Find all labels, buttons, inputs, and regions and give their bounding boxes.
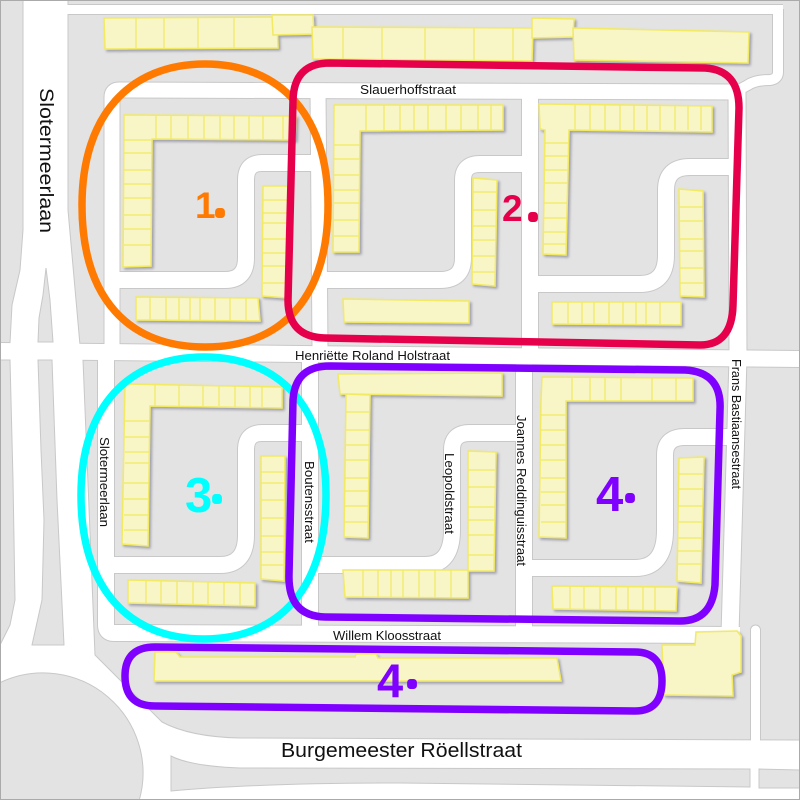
number 3: . [214,483,220,505]
number 1: . [217,197,223,219]
buildings: block 5 [338,373,502,598]
buildings: block 6 [539,377,704,611]
zone 2 outline [288,63,739,345]
street label: Slotermeerlaan main: Slotermeerlaan [35,88,56,233]
number 4 south: 4 [377,654,403,707]
number 3: 3 [185,469,212,523]
street label: Leopoldstraat: Leopoldstraat [442,453,456,535]
number 1: 1 [195,185,216,226]
street label: Boutensstraat: Boutensstraat [302,461,316,544]
street label: Frans Bastiaansestraat: Frans Bastiaansestraat [729,359,743,490]
buildings: block 1 [123,115,296,321]
number 2: . [530,201,536,223]
number 4: . [627,482,633,504]
street label: Henriëtte Roland Holstraat: Henriëtte Roland Holstraat [295,349,451,363]
street label: Slauerhoffstraat: Slauerhoffstraat [360,83,457,97]
street label: Willem Kloosstraat: Willem Kloosstraat [333,629,442,643]
medians and green strips [0,268,800,800]
buildings: top row [104,15,749,63]
zone 4 south outline [125,647,662,711]
buildings: block 4 [122,384,285,606]
zone 1 outline [82,64,328,347]
buildings: block 3 [539,104,712,325]
street label: Burgemeester Röellstraat: Burgemeester Röellstraat [281,740,522,762]
zone 3 outline [81,357,326,639]
number 2: 2 [502,188,523,229]
number 4: 4 [596,468,623,522]
street label: Joannes Reddinguisstraat: Joannes Reddinguisstraat [514,415,528,567]
street label: Slotermeerlaan small: Slotermeerlaan [97,437,111,527]
number 4 south: . [409,668,415,690]
buildings: south row [154,631,741,696]
zone 4 outline [289,366,720,621]
buildings: block 2 [333,105,503,323]
